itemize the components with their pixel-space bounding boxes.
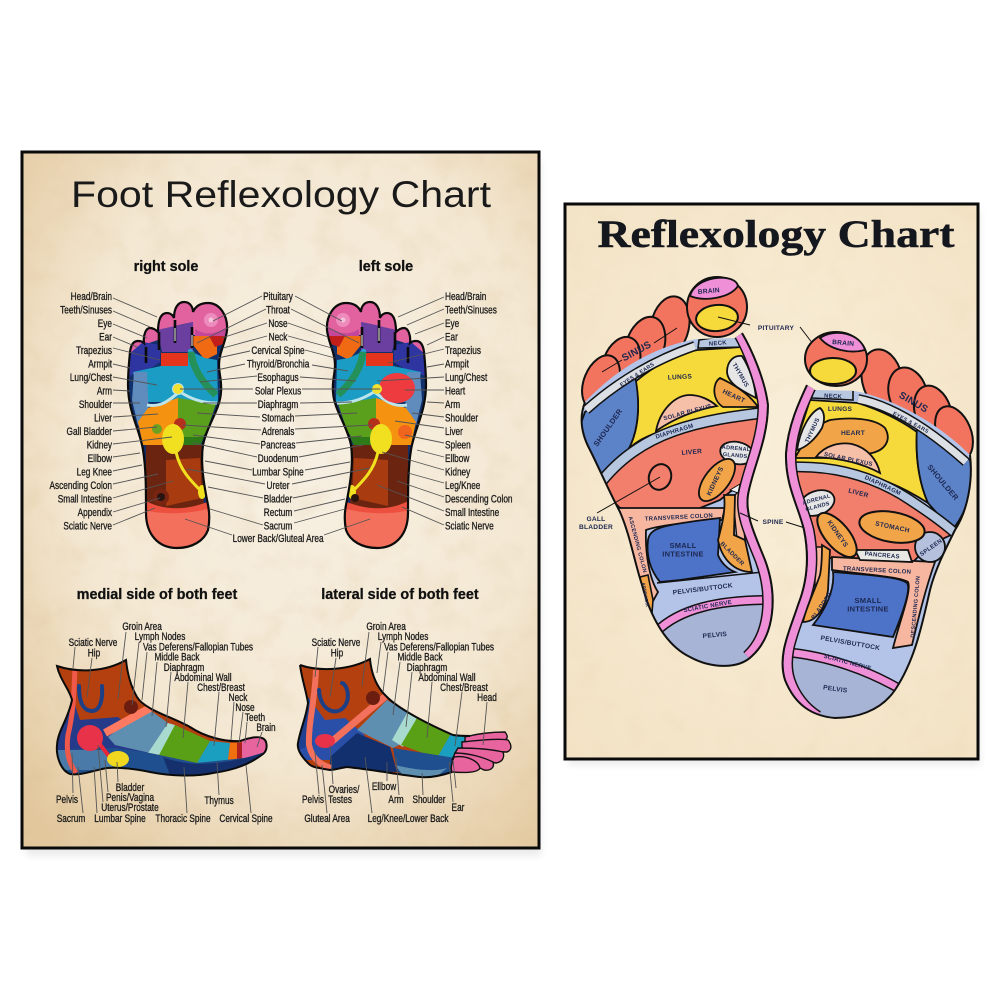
leader lines: lateral bbox=[315, 632, 487, 813]
region group: sole bbox=[582, 333, 772, 665]
labels: left footprint: LIVER bbox=[681, 448, 702, 457]
labels: right footprint: NECK bbox=[824, 394, 843, 400]
labels: right footprint: ADRENAL bbox=[802, 493, 832, 507]
labels: right footprint: SCIATIC NERVE bbox=[823, 654, 872, 672]
labels: medial: Uterus/Prostate bbox=[101, 802, 159, 814]
labels: right footprint: SMALL bbox=[854, 596, 882, 605]
heading: lateral side: lateral side of both feet bbox=[321, 587, 479, 603]
labels: center column: Adrenals bbox=[262, 426, 295, 438]
labels: right sole side: Ear bbox=[99, 332, 112, 344]
labels: left footprint: BLADDER bbox=[719, 541, 745, 568]
labels: left sole side: Ellbow bbox=[445, 453, 469, 465]
labels: right sole side: Gall Bladder bbox=[67, 426, 112, 438]
labels: right footprint: TRANSVERSE COLON bbox=[843, 566, 911, 576]
labels: center column: Throat bbox=[266, 305, 290, 317]
labels: medial: Groin Area bbox=[122, 621, 162, 633]
panel: foot reflexology poster bbox=[22, 152, 539, 848]
chart: lateral foot map bbox=[296, 657, 512, 778]
labels: lateral: Arm bbox=[388, 794, 404, 806]
labels: left sole side: Kidney bbox=[445, 467, 470, 479]
labels: right sole side: Shoulder bbox=[79, 399, 112, 411]
chart: left sole foot map bbox=[319, 295, 434, 555]
labels: medial: Chest/Breast bbox=[197, 682, 245, 694]
big toe bbox=[687, 277, 747, 337]
labels: center column: Lumbar Spine bbox=[252, 467, 304, 479]
labels: left sole side: Teeth/Sinuses bbox=[445, 305, 497, 317]
labels: left sole side: Heart bbox=[445, 386, 466, 398]
labels: left footprint: LUNGS bbox=[668, 373, 693, 382]
labels: right footprint: HEART bbox=[841, 430, 865, 437]
callouts: gall bladder, pituitary and spine: GALL bbox=[587, 516, 605, 523]
labels: right footprint: SOLAR PLEXUS bbox=[823, 452, 873, 468]
big toe right bbox=[805, 332, 867, 386]
heading: right sole: right sole bbox=[134, 259, 198, 275]
chart: left footprint map bbox=[575, 277, 780, 680]
callouts: gall bladder, pituitary and spine: SPINE bbox=[762, 519, 784, 526]
labels: lateral: Lymph Nodes bbox=[378, 631, 429, 643]
labels: left footprint: APPENDIX bbox=[641, 582, 650, 607]
labels: left sole side: Ear bbox=[445, 332, 458, 344]
labels: lateral: Abdominal Wall bbox=[418, 672, 476, 684]
labels: center column: Neck bbox=[269, 332, 288, 344]
labels: left footprint: DIAPHRAGM bbox=[655, 423, 694, 441]
labels: left footprint: NECK bbox=[709, 340, 728, 348]
labels: right sole side: Eye bbox=[98, 318, 112, 330]
labels: medial: Neck bbox=[229, 692, 248, 704]
labels: left footprint: SOLAR PLEXUS bbox=[663, 404, 713, 422]
labels: medial: Penis/Vagina bbox=[106, 792, 155, 804]
labels: medial: Sciatic Nerve bbox=[69, 637, 117, 649]
labels: center column: Lower Back/Gluteal Area bbox=[233, 533, 324, 545]
labels: left sole side: Lung/Chest bbox=[445, 372, 488, 384]
leader lines: medial bbox=[72, 632, 262, 813]
labels: left footprint: GLANDS bbox=[723, 452, 748, 460]
labels: right sole side: Kidney bbox=[87, 440, 112, 452]
labels: lateral: Ellbow bbox=[372, 781, 396, 793]
panel: reflexology poster bbox=[565, 204, 980, 759]
labels: lateral: Ear bbox=[452, 802, 464, 814]
labels: center column: Duodenum bbox=[258, 453, 298, 465]
labels: center column: Solar Plexus bbox=[255, 386, 301, 398]
labels: left footprint: BRAIN bbox=[698, 287, 720, 296]
labels: right footprint: BLADDER bbox=[811, 592, 834, 621]
labels: medial: Lymph Nodes bbox=[135, 631, 186, 643]
labels: right sole side: Arm bbox=[97, 386, 112, 398]
labels: right sole side: Sciatic Nerve bbox=[63, 521, 112, 533]
labels: lateral: Leg/Knee/Lower Back bbox=[368, 813, 449, 825]
chart: right footprint map bbox=[775, 332, 980, 725]
labels: right sole side: Head/Brain bbox=[71, 291, 112, 303]
labels: right footprint: LUNGS bbox=[828, 406, 853, 413]
labels: left footprint: KIDNEYS bbox=[706, 465, 726, 497]
labels: center column: Cervical Spine bbox=[251, 345, 305, 357]
labels: center column: Stomach bbox=[262, 413, 294, 425]
labels: center column: Ureter bbox=[267, 480, 289, 492]
labels: center column: Pituitary bbox=[263, 291, 293, 303]
labels: left footprint: THYMUS bbox=[731, 362, 749, 389]
labels: right sole side: Armpit bbox=[88, 359, 112, 371]
labels: left sole side: Head/Brain bbox=[445, 291, 486, 303]
labels: left sole side: Trapezius bbox=[445, 345, 481, 357]
labels: right footprint: STOMACH bbox=[874, 520, 910, 535]
labels: lateral: Gluteal Area bbox=[304, 813, 350, 825]
labels: left sole side: Armpit bbox=[445, 359, 469, 371]
toes: sinus right bbox=[856, 345, 980, 465]
labels: right sole side: Teeth/Sinuses bbox=[60, 305, 112, 317]
labels: lateral: Testes bbox=[328, 794, 352, 806]
labels: left sole side bbox=[445, 291, 513, 533]
labels: left footprint: ASCENDING COLON bbox=[627, 516, 647, 574]
labels: left footprint: EYES & EARS bbox=[619, 362, 656, 388]
labels: right footprint: DIAPHRAGM bbox=[863, 475, 901, 497]
labels: lateral: Hip bbox=[331, 648, 343, 660]
labels: right footprint: EYES & EARS bbox=[892, 411, 929, 435]
labels: right footprint: SPLEEN bbox=[919, 538, 944, 558]
labels: center column: Diaphragm bbox=[258, 399, 298, 411]
labels: medial: Teeth bbox=[245, 712, 265, 724]
callouts: gall bladder, pituitary and spine: PITUITARY bbox=[758, 325, 795, 332]
labels: left footprint: PELVIS bbox=[702, 631, 728, 640]
labels: medial: Middle Back bbox=[155, 652, 200, 664]
labels: left footprint: ADRENAL bbox=[722, 445, 751, 453]
labels: lateral: Pelvis bbox=[302, 794, 324, 806]
labels: center column: Thyroid/Bronchia bbox=[247, 359, 310, 371]
callouts: gall bladder, pituitary and spine bbox=[579, 317, 950, 531]
midfoot teal behind toes bbox=[453, 735, 470, 757]
labels: left footprint: HEART bbox=[721, 388, 746, 405]
chart: medial foot map bbox=[56, 658, 268, 776]
chart: right sole foot map bbox=[120, 295, 235, 555]
labels: left sole side: Arm bbox=[445, 399, 460, 411]
labels: medial: Sacrum bbox=[57, 813, 85, 825]
labels: center column: Bladder bbox=[264, 494, 292, 506]
labels: right footprint: LIVER bbox=[847, 487, 869, 500]
labels: lateral: Middle Back bbox=[398, 652, 443, 664]
labels: lateral: Shoulder bbox=[412, 794, 446, 806]
labels: right sole side bbox=[50, 291, 112, 533]
labels: lateral: Ovaries/ bbox=[329, 784, 360, 796]
leader lines: soles bbox=[113, 296, 444, 535]
labels: center column bbox=[233, 291, 324, 545]
labels: lateral: Groin Area bbox=[366, 621, 406, 633]
labels: right sole side: Leg Knee bbox=[77, 467, 112, 479]
labels: center column: Esophagus bbox=[257, 372, 299, 384]
labels: left footprint: TRANSVERSE COLON bbox=[645, 513, 713, 523]
labels: right footprint: PELVIS bbox=[823, 684, 848, 695]
labels: right sole side: Lung/Chest bbox=[70, 372, 112, 384]
labels: medial: Brain bbox=[256, 722, 276, 734]
labels: lateral: Sciatic Nerve bbox=[312, 637, 360, 649]
labels: left sole side: Liver bbox=[445, 426, 463, 438]
labels: medial: Abdominal Wall bbox=[174, 672, 232, 684]
labels: medial bbox=[56, 621, 276, 825]
labels: left sole side: Sciatic Nerve bbox=[445, 521, 494, 533]
labels: right sole side: Trapezius bbox=[76, 345, 112, 357]
labels: right sole side: Liver bbox=[94, 413, 112, 425]
labels: right footprint: THYMUS bbox=[805, 417, 821, 444]
labels: right sole side: Small Intestine bbox=[58, 494, 112, 506]
labels: medial: Thoracic Spine bbox=[155, 813, 211, 825]
labels: left sole side: Small Intestine bbox=[445, 507, 499, 519]
labels: medial: Lumbar Spine bbox=[94, 813, 146, 825]
title: foot reflexology chart: Foot Reflexology Chart bbox=[71, 174, 492, 215]
labels: right sole side: Ascending Colon bbox=[50, 480, 112, 492]
labels: medial: Pelvis bbox=[56, 794, 78, 806]
icon: right sole solar plexus point bbox=[172, 384, 184, 394]
labels: lateral: Diaphragm bbox=[407, 662, 447, 674]
labels: left sole side: Descending Colon bbox=[445, 494, 513, 506]
callouts: gall bladder, pituitary and spine: BLADDER bbox=[579, 524, 613, 531]
labels: left sole side: Eye bbox=[445, 318, 459, 330]
labels: lateral bbox=[302, 621, 497, 825]
title: reflexology chart: Reflexology Chart bbox=[598, 213, 954, 256]
labels: medial: Bladder bbox=[116, 782, 144, 794]
labels: medial: Hip bbox=[88, 648, 100, 660]
labels: right footprint bbox=[802, 339, 961, 695]
labels: center column: Rectum bbox=[264, 507, 292, 519]
labels: medial: Thymus bbox=[204, 795, 234, 807]
labels: right footprint: SHOULDER bbox=[925, 463, 961, 502]
labels: medial: Cervical Spine bbox=[219, 813, 273, 825]
region group: sole right bbox=[775, 385, 975, 725]
toes: sinus bbox=[575, 293, 695, 414]
labels: left footprint: SHOULDER bbox=[592, 407, 624, 448]
labels: left footprint: SINUS bbox=[620, 339, 654, 364]
labels: right sole side: Appendix bbox=[78, 507, 112, 519]
labels: left footprint: INTESTINE bbox=[662, 550, 704, 558]
labels: lateral: Head bbox=[477, 692, 497, 704]
labels: right footprint: SINUS bbox=[897, 390, 930, 416]
labels: left footprint: SCIATIC NERVE bbox=[683, 600, 732, 614]
labels: right footprint: GLANDS bbox=[805, 501, 831, 513]
labels: center column: Pancreas bbox=[261, 440, 296, 452]
labels: right footprint: PELVIS/BUTTOCK bbox=[820, 635, 881, 652]
labels: left footprint: PELVIS/BUTTOCK bbox=[672, 582, 733, 597]
labels: right sole side: Ellbow bbox=[88, 453, 112, 465]
labels: right footprint: INTESTINE bbox=[847, 604, 889, 614]
labels: right footprint: KIDNEYS bbox=[825, 519, 849, 549]
labels: left sole side: Spleen bbox=[445, 440, 471, 452]
heading: left sole: left sole bbox=[359, 259, 413, 275]
labels: medial: Nose bbox=[235, 702, 255, 714]
labels: medial: Diaphragm bbox=[164, 662, 204, 674]
labels: lateral: Vas Deferens/Fallopian Tubes bbox=[384, 642, 494, 654]
labels: lateral: Chest/Breast bbox=[440, 682, 488, 694]
labels: left sole side: Leg/Knee bbox=[445, 480, 480, 492]
labels: left sole side: Shoulder bbox=[445, 413, 478, 425]
labels: left footprint bbox=[592, 287, 751, 640]
toes: lateral foot bbox=[451, 732, 511, 773]
labels: center column: Sacrum bbox=[264, 521, 292, 533]
heading: medial side: medial side of both feet bbox=[77, 587, 237, 603]
labels: right footprint: DESCENDING COLON bbox=[910, 576, 922, 638]
labels: right footprint: BRAIN bbox=[832, 339, 854, 348]
labels: left footprint: SMALL bbox=[669, 541, 697, 550]
labels: medial: Vas Deferens/Fallopian Tubes bbox=[143, 642, 253, 654]
labels: center column: Nose bbox=[268, 318, 288, 330]
labels: right footprint: PANCREAS bbox=[864, 551, 900, 561]
